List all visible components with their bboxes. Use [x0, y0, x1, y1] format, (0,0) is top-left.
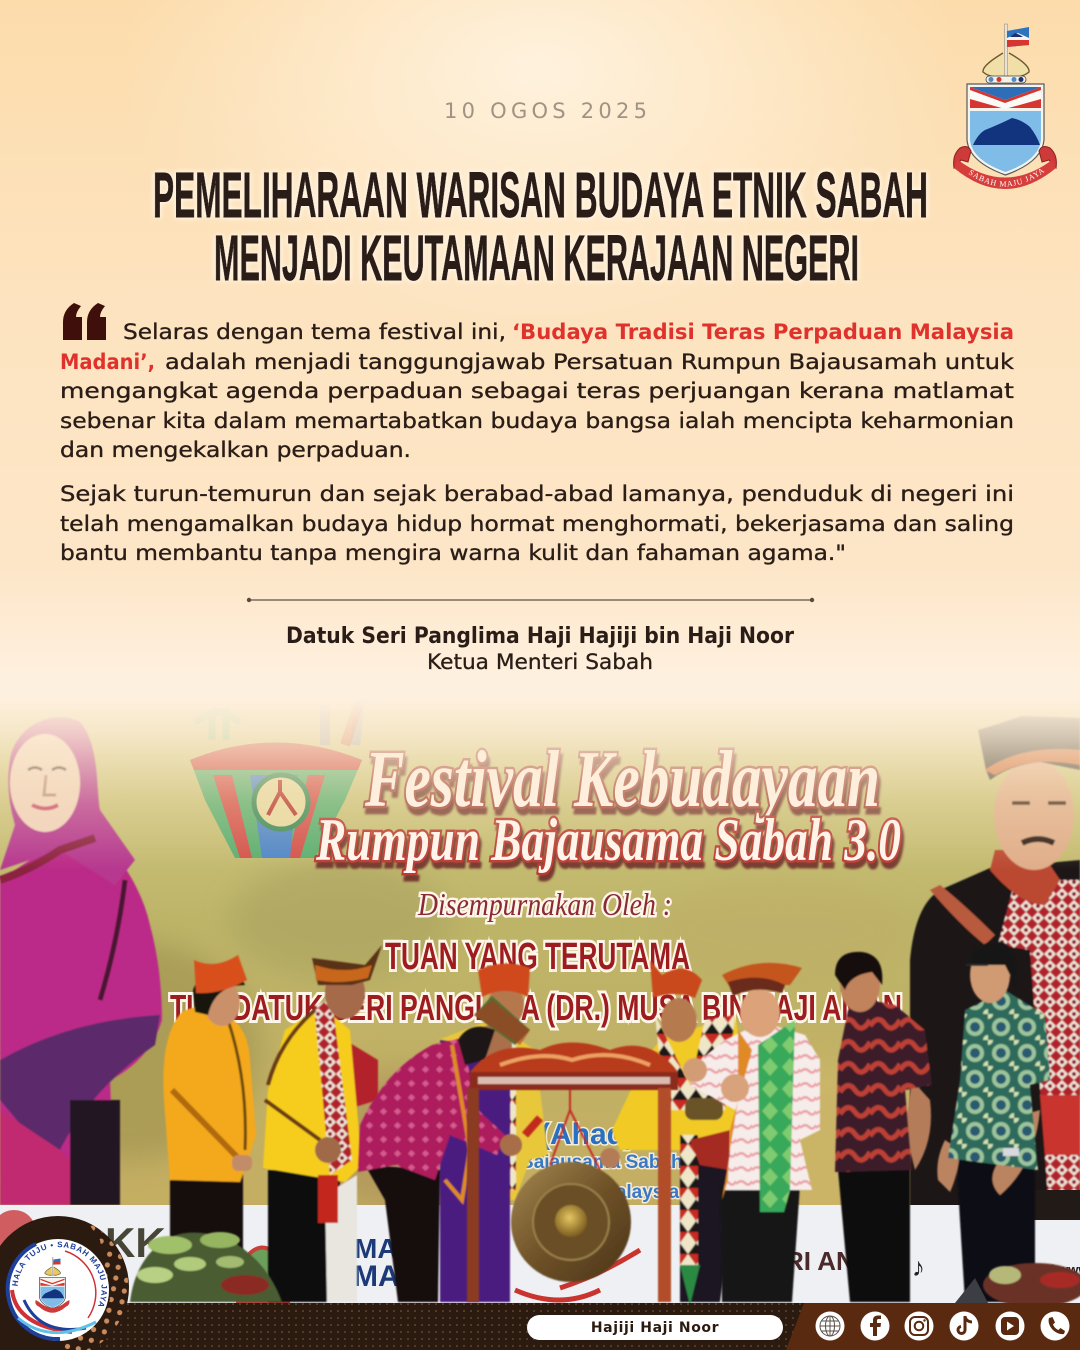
quote paragraph 1: [60, 320, 1015, 462]
festival title line 2: Rumpun Bajausama Sabah 3.0: [315, 807, 901, 873]
plants left: [130, 1232, 282, 1302]
name pill: [527, 1315, 783, 1340]
mountain: [973, 118, 1040, 145]
icon: youtube: [996, 1312, 1024, 1340]
ribbon: [953, 146, 1057, 189]
footer dots: [100, 1303, 806, 1350]
banner logos: KK: [105, 1219, 166, 1266]
footer dark dotted section: [0, 1303, 806, 1350]
festival logo basket: [190, 695, 375, 858]
footer bar: [0, 1303, 1080, 1350]
ribbon: SABAH MAJU JAYA: [968, 168, 1045, 187]
screen text: date: (Ahad) 10.08: [540, 1118, 718, 1151]
shield: [967, 84, 1044, 175]
round badge: [0, 1216, 129, 1350]
person: man behind gong: [438, 963, 548, 1200]
badge curved text: HALA TUJU • SABAH MAJU JAYA: [12, 1242, 108, 1306]
icon: tiktok: [950, 1312, 978, 1340]
plants right: [983, 1263, 1080, 1307]
banner logos: RI AN: [785, 1246, 855, 1276]
icon: quotation mark: [63, 303, 106, 340]
screen text: venue: Bajausama Sabah, Taman: [520, 1152, 753, 1173]
banner logos: MA: [354, 1233, 398, 1264]
banner strip: [0, 1205, 1080, 1303]
beads: [986, 76, 1026, 83]
quote paragraph 2: telah mengamalkan budaya hidup hormat menghormati, bekerjasama dan saling: [60, 512, 1014, 536]
quote paragraph 1: mengangkat agenda perpaduan sebagai teras perjuangan kerana matlamat: [60, 379, 1014, 403]
icon: instagram: [904, 1312, 934, 1340]
badge swooshes: [8, 1244, 96, 1339]
person: far left man in orange: [163, 955, 256, 1272]
quote paragraph 2: [60, 482, 1014, 565]
icon: website globe: [816, 1312, 844, 1340]
quote paragraph 1: adalah menjadi tanggungjawab Persatuan Rumpun Bajausamah untuk: [165, 350, 1015, 374]
quote paragraph 1: Madani’,: [60, 350, 155, 374]
screen text: TYT: TUAN YANG TERUTAMA: [385, 936, 690, 978]
shield sky: [970, 111, 1041, 172]
gong stand and gong: [467, 1042, 678, 1302]
right backdrop lower: [982, 1190, 1080, 1220]
quote paragraph 2: bantu membantu tanpa mengira warna kulit dan fahaman agama.": [60, 541, 846, 565]
quote paragraph 1: dan mengekalkan perpaduan.: [60, 438, 411, 462]
footer brown section: [786, 1303, 1080, 1350]
badge dot texture: [60, 1223, 128, 1350]
stage backdrop: [0, 680, 1080, 1220]
person: man in green batik: [937, 942, 1050, 1302]
banner logos: ♪: [912, 1252, 925, 1282]
right portrait man: [910, 716, 1080, 1225]
background glow: [120, 0, 960, 330]
badge white disc: [7, 1239, 109, 1341]
name pill: Hajiji Haji Noor: [591, 1320, 719, 1336]
icon: facebook: [860, 1312, 890, 1340]
icon: phone: [1040, 1312, 1070, 1340]
woman portrait: [0, 717, 162, 1205]
quote paragraph 1: sebenar kita dalam memartabatkan budaya bangsa ialah mencipta keharmonian: [60, 409, 1014, 433]
festival title line 1: Festival Kebudayaan: [364, 736, 880, 824]
banner logos: [0, 1210, 1080, 1302]
divider: [247, 598, 814, 602]
speaker title: Ketua Menteri Sabah: [427, 650, 653, 674]
stage speaker: [955, 1278, 988, 1303]
person: yellow shirt man with red sash: [263, 945, 382, 1302]
quote paragraph 2: Sejak turun-temurun dan sejak berabad-abad lamanya, penduduk di negeri ini: [60, 482, 1014, 506]
quote paragraph 1: ‘Budaya Tradisi Teras Perpaduan Malaysia: [512, 320, 1014, 344]
hands and arms: [983, 53, 1029, 77]
screen text: country: Malaysia: [600, 1182, 680, 1203]
badge dark sphere: [0, 1216, 129, 1350]
top fade over photo: [0, 680, 1080, 870]
badge emblem: [35, 1257, 69, 1313]
person: man with lozenge sash: [600, 960, 745, 1305]
person: man in red batik: [835, 952, 932, 1302]
banner logos: MA: [353, 1260, 400, 1293]
flag and pole: [1004, 24, 1029, 80]
person: bending man in pink: [358, 996, 540, 1302]
speaker name: Datuk Seri Panglima Haji Hajiji bin Haji Noor: [286, 624, 794, 649]
date: 10 OGOS 2025: [444, 99, 647, 123]
person: chief minister in white with green sash: [683, 963, 820, 1302]
photo: gong ceremony at Festival Kebudayaan: [0, 680, 1080, 1307]
disempurnakan oleh: Disempurnakan Oleh :: [417, 886, 672, 922]
state coat of arms: [953, 24, 1057, 189]
backdrop texture: [0, 860, 940, 1240]
title: [153, 159, 928, 294]
quote paragraph 1: Selaras dengan tema festival ini,: [123, 320, 506, 344]
shield chevrons: [970, 87, 1041, 109]
